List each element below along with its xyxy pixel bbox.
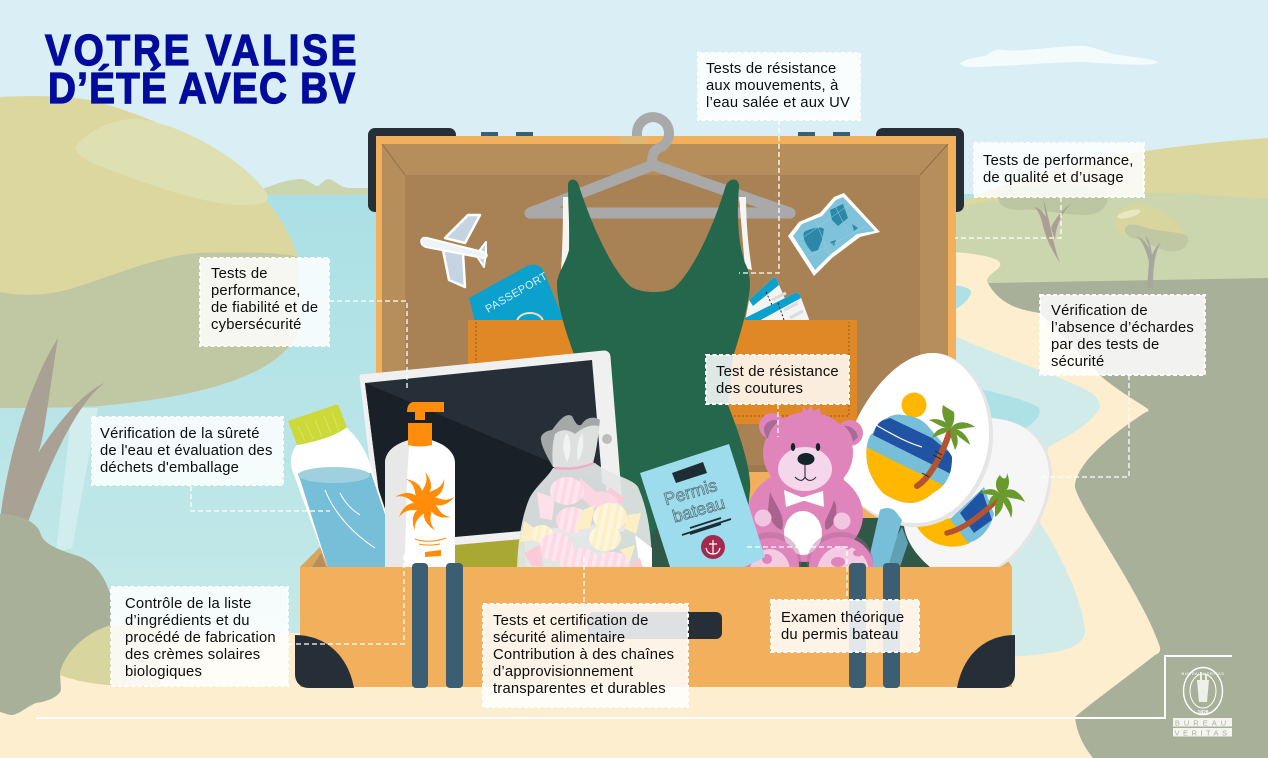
candy bag — [517, 415, 652, 576]
label: cybersecurity: Tests de — [211, 266, 268, 282]
label: performance and quality: de qualité et d’usage — [983, 170, 1124, 186]
hanger — [530, 117, 790, 213]
logo: Bureau Veritas: VERITAS — [1174, 728, 1231, 738]
label: splinters: sécurité — [1051, 354, 1104, 370]
candies — [520, 477, 643, 576]
label: seams: des coutures — [716, 381, 803, 397]
label: cybersecurity: cybersécurité — [211, 317, 302, 333]
title — [45, 25, 357, 113]
suitcase base — [295, 563, 1015, 688]
passport — [469, 265, 566, 325]
passport: PASSEPORT — [484, 270, 550, 316]
label: sunscreen: biologiques — [125, 664, 202, 680]
label: cybersecurity: de fiabilité et de — [211, 300, 318, 316]
boat licence booklet — [640, 444, 765, 570]
label: food safety: Tests et certification de — [493, 613, 649, 629]
label: cybersecurity: performance, — [211, 283, 301, 299]
lagoon — [950, 285, 1100, 657]
distant hill — [260, 179, 372, 195]
label: splinters — [1040, 295, 1205, 375]
cloud — [960, 46, 1158, 67]
label: boat exam: du permis bateau — [781, 627, 899, 643]
label: sunscreen — [111, 587, 288, 686]
boarding passes — [745, 278, 810, 322]
right tree — [1115, 204, 1188, 288]
label: seams — [706, 355, 849, 404]
title: D’ÉTÉ AVEC BV — [48, 63, 355, 113]
airplane — [421, 215, 487, 287]
blue strap item — [867, 508, 908, 567]
label: sunscreen: des crèmes solaires — [125, 647, 260, 663]
water bottle — [288, 405, 392, 568]
label: food safety — [483, 604, 688, 707]
logo: Bureau Veritas: BUREAU — [1175, 718, 1230, 728]
right hills — [952, 138, 1268, 290]
sea — [0, 194, 1000, 644]
dark green land — [988, 278, 1268, 758]
label: food safety: sécurité alimentaire — [493, 630, 625, 646]
label: water safety: de l'eau et évaluation des — [100, 443, 273, 459]
palm reflection — [56, 408, 98, 552]
label: boat exam: Examen théorique — [781, 610, 904, 626]
label: water safety — [92, 417, 283, 485]
label: resistance to movement: aux mouvements, à — [706, 78, 839, 94]
second paddle — [904, 418, 1052, 567]
left tree trunk — [0, 338, 106, 522]
label: food safety: d’approvisionnement — [493, 664, 633, 680]
label: boat exam — [771, 600, 919, 652]
label: performance and quality — [974, 143, 1144, 197]
world map — [788, 193, 880, 276]
label: performance and quality: Tests de performance, — [983, 153, 1134, 169]
label: resistance to movement — [698, 53, 860, 120]
label: splinters: par des tests de — [1051, 337, 1159, 353]
label: seams: Test de résistance — [716, 364, 839, 380]
tablet — [361, 352, 623, 568]
sunscreen bottle — [385, 402, 456, 568]
swimsuit — [557, 179, 750, 570]
bottom-left bush — [0, 514, 160, 715]
swimsuit straps — [561, 197, 752, 270]
label: sunscreen: procédé de fabrication — [125, 630, 276, 646]
label: water safety: déchets d'emballage — [100, 460, 239, 476]
right distant tree — [998, 184, 1108, 263]
label: sunscreen: Contrôle de la liste — [125, 596, 252, 612]
beach sand — [0, 252, 1160, 758]
left hill — [0, 96, 298, 408]
suitcase base interior — [300, 518, 1012, 567]
main paddle — [843, 353, 993, 527]
title: VOTRE VALISE — [45, 25, 357, 75]
label: splinters: Vérification de — [1051, 303, 1148, 319]
logo: Bureau Veritas — [1173, 668, 1232, 738]
logo: Bureau Veritas: BUREAU VERITAS — [1182, 671, 1224, 676]
label: food safety: transparentes et durables — [493, 681, 666, 697]
boat licence booklet: Permis — [662, 475, 720, 509]
label: sunscreen: d’ingrédients et du — [125, 613, 250, 629]
suitcase lid — [368, 128, 964, 526]
white frame line — [36, 656, 1232, 718]
icon: sun — [395, 472, 456, 532]
teddy bear — [739, 405, 873, 600]
label: food safety: Contribution à des chaînes — [493, 647, 674, 663]
label: cybersecurity — [200, 258, 329, 346]
label: water safety: Vérification de la sûreté — [100, 426, 260, 442]
label: splinters: l’absence d’échardes — [1051, 320, 1194, 336]
connector lines — [191, 120, 1129, 644]
boat licence booklet: bateau — [670, 493, 727, 526]
inner pocket — [468, 320, 857, 424]
logo: Bureau Veritas: 1828 — [1197, 710, 1209, 716]
label: resistance to movement: l’eau salée et aux UV — [706, 95, 850, 111]
label: resistance to movement: Tests de résistance — [706, 61, 836, 77]
